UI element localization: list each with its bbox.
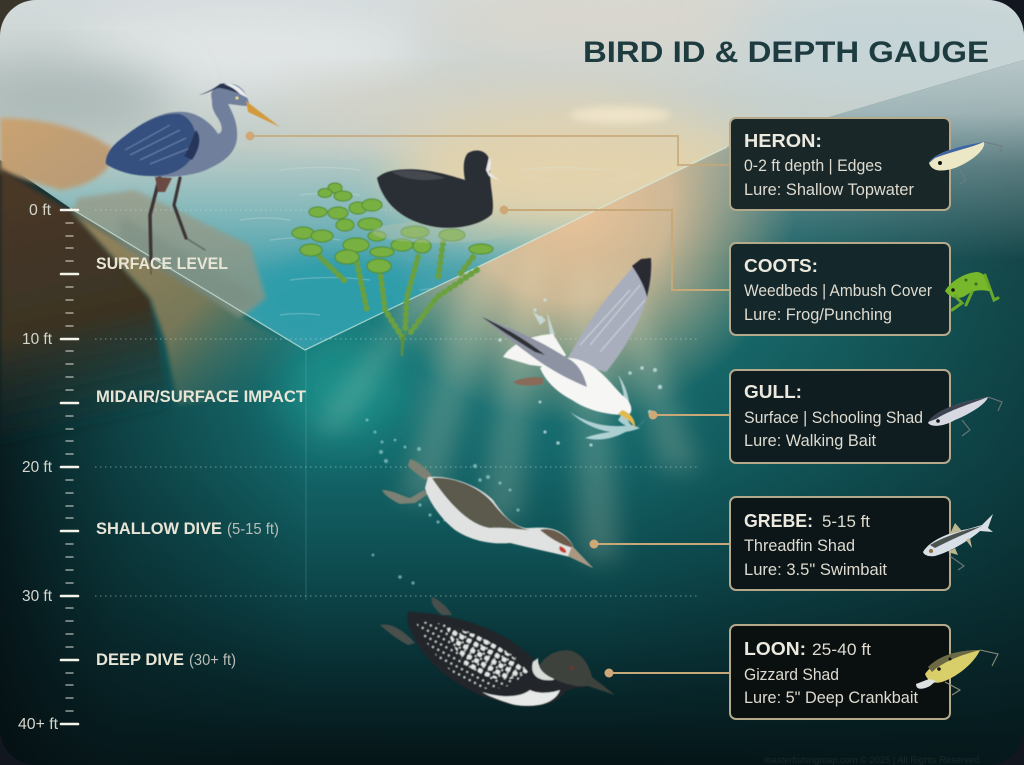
text: gull habitat: Surface | Schooling Shad xyxy=(744,408,923,427)
dotted depth lines xyxy=(95,210,700,596)
connector: heron xyxy=(250,136,730,165)
text: loon forage: Gizzard Shad xyxy=(744,665,839,684)
heading: coots: COOTS: xyxy=(744,255,818,276)
connector: coots xyxy=(504,210,730,290)
zone label: deep dive: DEEP DIVE xyxy=(96,651,184,669)
text: loon depth: 25-40 ft xyxy=(812,640,871,659)
panel: grebe xyxy=(730,497,950,590)
zone label: shallow dive xyxy=(96,522,278,538)
zone label: surface level: SURFACE LEVEL xyxy=(96,255,228,273)
title: BIRD ID & DEPTH GAUGE xyxy=(583,36,989,69)
icon: crankbait lure xyxy=(916,650,998,695)
panel: coots xyxy=(730,243,950,335)
depth gauge scale xyxy=(18,202,78,733)
icon: diving gull xyxy=(482,258,662,447)
depth label: 10 ft: 10 ft xyxy=(22,331,53,348)
depth label: 0 ft: 0 ft xyxy=(29,202,52,219)
icon: topwater lure xyxy=(929,142,1002,184)
water line xyxy=(70,147,727,350)
icon: diving grebe xyxy=(366,418,593,585)
heading: heron: HERON: xyxy=(744,130,822,151)
icon: great blue heron xyxy=(106,84,280,274)
heading: gull: GULL: xyxy=(744,381,802,402)
icon: coot xyxy=(372,150,508,243)
icon: swimbait lure xyxy=(923,514,993,570)
depth label: 40+ ft: 40+ ft xyxy=(18,716,59,733)
connector: grebe xyxy=(594,543,730,545)
background: sky and water surface xyxy=(0,0,1024,350)
text: coots habitat: Weedbeds | Ambush Cover xyxy=(744,281,932,300)
text: grebe depth: 5-15 ft xyxy=(822,512,870,531)
zone label: deep dive xyxy=(97,654,236,668)
icon: frog lure xyxy=(945,272,998,310)
text: heron depth: 0-2 ft depth | Edges xyxy=(744,156,882,175)
zone label: deep dive: (30+ ft) xyxy=(189,652,236,669)
light rays xyxy=(315,240,700,560)
zone label: shallow dive: SHALLOW DIVE xyxy=(96,520,222,538)
text: grebe forage: Threadfin Shad xyxy=(744,536,855,555)
depth label: 30 ft: 30 ft xyxy=(22,588,53,605)
zone label: midair/surface impact: MIDAIR/SURFACE IMPACT xyxy=(96,388,306,406)
text: faint copyright: masterfishingmap.com © 2025 | All Rights Reserved xyxy=(764,755,979,765)
zone label: shallow dive: (5-15 ft) xyxy=(227,521,279,538)
depth label: 20 ft: 20 ft xyxy=(22,459,53,476)
icon: diving loon xyxy=(380,597,615,706)
panel: gull xyxy=(730,370,950,463)
text: grebe lure: Lure: 3.5" Swimbait xyxy=(744,560,887,579)
icon: walking bait lure xyxy=(928,397,1002,436)
icon: aquatic weeds xyxy=(292,183,493,356)
heading: loon: LOON: xyxy=(744,638,806,659)
connector lines xyxy=(246,132,730,678)
text: heron lure: Lure: Shallow Topwater xyxy=(744,180,914,199)
text: gull lure: Lure: Walking Bait xyxy=(744,431,876,450)
connector: gull xyxy=(653,414,730,416)
text: loon lure: Lure: 5" Deep Crankbait xyxy=(744,688,918,707)
panel: heron xyxy=(730,118,950,210)
rock shore xyxy=(0,115,286,416)
text: coots lure: Lure: Frog/Punching xyxy=(744,305,892,324)
heading: grebe: GREBE: xyxy=(744,510,813,531)
panel: loon xyxy=(730,625,950,719)
connector: loon xyxy=(609,672,730,674)
